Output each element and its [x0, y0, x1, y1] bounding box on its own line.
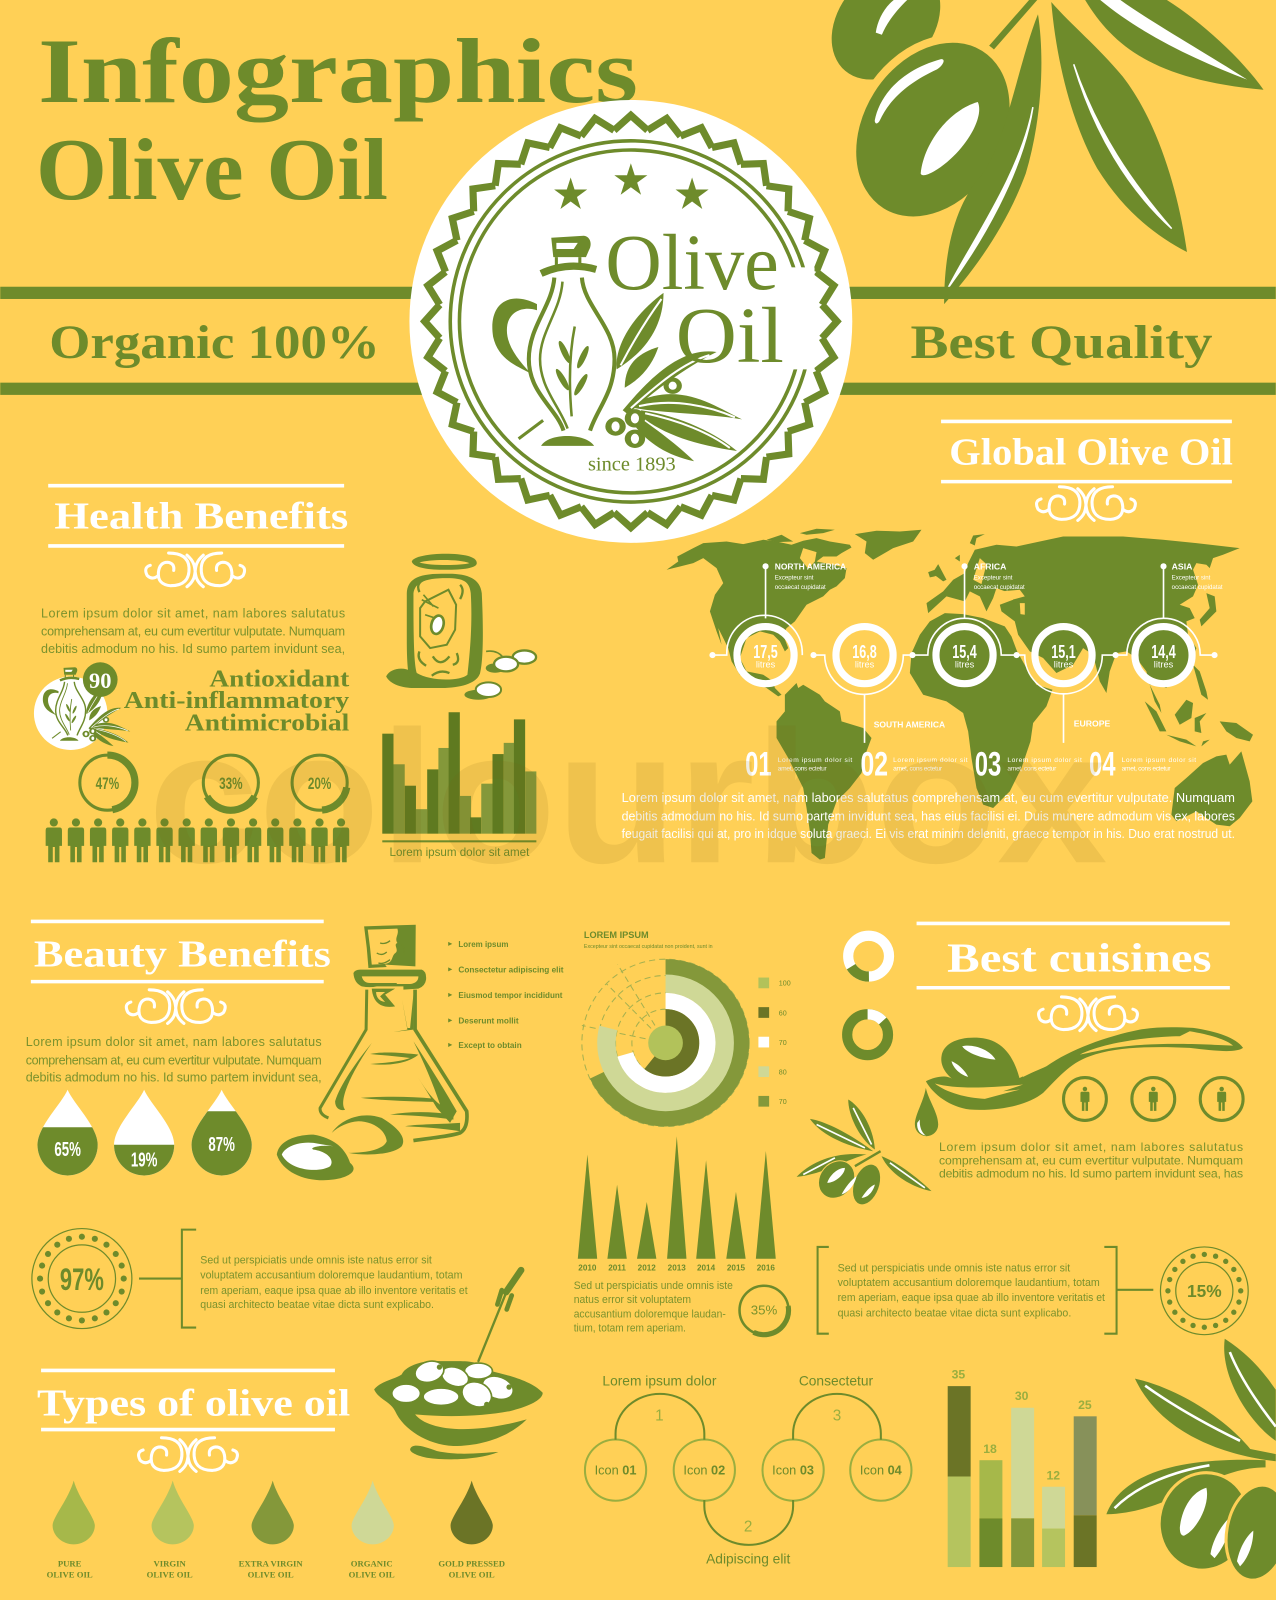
left bracket text: rem aperiam, eaque ipsa quae ab illo inventore veritatis et	[200, 1285, 468, 1297]
small donut green	[847, 1014, 888, 1055]
bullet list: Eiusmod tempor incididunt	[458, 990, 563, 1000]
beauty paragraph: comprehensam at, eu cum evertitur vulputate. Numquam	[26, 1053, 322, 1067]
map region labels: Excepteur sint	[974, 575, 1013, 582]
right bracket text: quasi architecto beatae vitae dicta sunt explicabo.	[838, 1307, 1071, 1319]
beauty paragraph	[26, 1035, 322, 1085]
map rings with values: litres	[855, 659, 875, 669]
stacked bar chart: 30	[1015, 1389, 1029, 1403]
process diagram: icon circles and arcs: Icon 02	[683, 1462, 725, 1477]
numbered notes 01-04: Lorem ipsum dolor sit	[893, 757, 968, 764]
oil type labels: OLIVE OIL	[147, 1570, 193, 1580]
stat: 15 percent circle: 15%	[1187, 1281, 1222, 1301]
heading: Types of olive oil	[37, 1370, 350, 1471]
numbered notes 01-04: amet, cons ectetur	[1007, 765, 1057, 772]
map region labels: occaecat cupidatat	[775, 584, 826, 591]
map region labels: occaecat cupidatat	[1172, 584, 1223, 591]
watermark: colourbox	[148, 692, 1107, 903]
health paragraph: comprehensam at, eu cum evertitur vulputate. Numquam	[41, 625, 345, 639]
heading: Best cuisines: Best cuisines	[947, 935, 1211, 980]
map region labels: AFRICA	[974, 561, 1007, 571]
drop gauge 65 percent: 65%	[54, 1139, 81, 1161]
green bands	[0, 287, 1276, 395]
oil type labels: GOLD PRESSED	[438, 1558, 505, 1568]
bar chart: overlapping bars	[382, 712, 536, 859]
icon: flask with olives	[277, 925, 467, 1180]
central badge: Olive Oil since 1893: Oil	[676, 292, 784, 380]
stacked bar chart: 18	[983, 1442, 997, 1456]
bullet list: Consectetur adipiscing elit	[458, 964, 564, 974]
percentage rings 47 33 20: 47%	[96, 775, 119, 793]
central badge: Olive Oil since 1893: since 1893	[588, 453, 676, 475]
chart legend: 60	[779, 1009, 787, 1017]
oil type labels: OLIVE OIL	[449, 1570, 495, 1580]
left bracket	[139, 1230, 196, 1328]
right bracket text	[838, 1262, 1105, 1319]
stacked bar chart: 12	[1047, 1469, 1060, 1483]
cuisines paragraph: debitis admodum no his. Id sumo partem invidunt sea, has	[939, 1167, 1243, 1181]
icon: small bottle with 90 badge	[34, 662, 130, 750]
map rings with values: litres	[756, 659, 776, 669]
heading: Global Olive Oil	[941, 421, 1233, 520]
ring 35 percent	[736, 1282, 792, 1339]
numbered notes 01-04: Lorem ipsum dolor sit	[778, 757, 852, 764]
stacked bar chart	[948, 1368, 1097, 1567]
small donut white	[848, 936, 889, 977]
title: Olive Oil: Olive Oil	[36, 121, 388, 218]
central badge: Olive Oil since 1893: Olive	[605, 219, 779, 307]
spike bar chart 2010-2016	[578, 1136, 776, 1272]
process diagram: icon circles and arcs: 1	[655, 1407, 664, 1424]
stat: 97 percent circle: 97%	[60, 1261, 104, 1297]
process diagram: icon circles and arcs: 2	[744, 1519, 752, 1536]
icon: small bottle with 90 badge: 90	[89, 668, 111, 693]
oil type labels: PURE	[58, 1558, 82, 1568]
map rings with values	[737, 627, 1192, 684]
map rings with values: 17,5	[753, 641, 778, 662]
subtitle: Organic 100%: Organic 100%	[49, 316, 380, 369]
bottom right olive branch	[1106, 1339, 1276, 1585]
process diagram: icon circles and arcs	[585, 1374, 911, 1566]
spike chart caption: natus error sit voluptatem	[574, 1294, 691, 1306]
bullet list: Except to obtain	[458, 1040, 522, 1050]
oil type labels: EXTRA VIRGIN	[239, 1558, 303, 1568]
title: Infographics: Infographics	[38, 20, 638, 122]
heading: Health Benefits	[48, 486, 348, 587]
bullet list: Lorem ipsum	[458, 939, 509, 949]
chart title	[584, 930, 713, 950]
icon: small olive branch	[797, 1100, 932, 1208]
drop gauge 87 percent: 87%	[208, 1134, 235, 1156]
process diagram: icon circles and arcs: Icon 04	[860, 1462, 903, 1477]
global paragraph: debitis admodum no his. Id sumo partem invidunt sea, has eius facilisi ei. Duis munere admodum vis ex, labores	[622, 808, 1235, 823]
numbered notes 01-04: 01	[745, 746, 772, 784]
bullet list	[448, 939, 564, 1050]
spike chart caption	[574, 1280, 733, 1335]
drop gauge 87 percent	[192, 1090, 252, 1176]
spike bar chart 2010-2016: 2011	[608, 1263, 626, 1272]
map rings with values: 16,8	[852, 641, 877, 662]
stacked bar chart: 35	[952, 1368, 965, 1382]
oil type labels: OLIVE OIL	[349, 1570, 395, 1580]
right bracket text: rem aperiam, eaque ipsa quae ab illo inventore veritatis et	[838, 1292, 1105, 1304]
process diagram: icon circles and arcs: Adipiscing elit	[706, 1551, 790, 1566]
spike chart caption: tium, totam rem aperiam.	[574, 1323, 686, 1335]
right brackets	[818, 1247, 1153, 1334]
numbered notes 01-04: 03	[975, 746, 1001, 784]
icon: olive on spoon with drop	[915, 1027, 1243, 1136]
map region labels: EUROPE	[1074, 719, 1110, 729]
spike chart caption: Sed ut perspiciatis unde omnis iste	[574, 1280, 733, 1292]
process diagram: icon circles and arcs: 3	[833, 1407, 841, 1424]
stat: 97 percent circle	[32, 1229, 132, 1329]
oil type labels: OLIVE OIL	[47, 1570, 93, 1580]
row of people icons	[46, 818, 349, 862]
health benefit list: Antioxidant	[209, 666, 350, 693]
person circle icons	[1064, 1078, 1243, 1120]
spike bar chart 2010-2016: 2010	[578, 1263, 597, 1272]
process diagram: icon circles and arcs: Consectetur	[799, 1374, 873, 1389]
chart legend	[758, 978, 791, 1107]
percentage rings 47 33 20	[80, 745, 352, 820]
right bracket text: Sed ut perspiciatis unde omnis iste natus error sit	[838, 1262, 1070, 1274]
map region labels: Excepteur sint	[1172, 575, 1211, 582]
percentage rings 47 33 20: 20%	[308, 775, 332, 793]
map rings with values: 14,4	[1151, 641, 1176, 662]
oil type labels: ORGANIC	[351, 1558, 393, 1568]
health benefit list: Anti-inflammatory	[124, 687, 349, 714]
cuisines paragraph: comprehensam at, eu cum evertitur vulputate. Numquam	[939, 1153, 1243, 1167]
spike bar chart 2010-2016: 2015	[727, 1263, 745, 1272]
world map	[667, 529, 1253, 860]
chart legend: 80	[779, 1068, 787, 1076]
oil type drops	[53, 1481, 493, 1544]
drop gauge 65 percent	[37, 1090, 98, 1176]
numbered notes 01-04: amet, cons ectetur	[778, 765, 828, 772]
stacked bar chart: 25	[1078, 1398, 1092, 1412]
health benefit list: Antimicrobial	[185, 710, 349, 737]
map rings with values: litres	[955, 659, 975, 669]
chart title: Excepteur sint occaecat cupidatat non proident, sunt in	[584, 944, 713, 950]
beauty paragraph: debitis admodum no his. Id sumo partem invidunt sea,	[26, 1071, 322, 1085]
subtitle: Best Quality: Best Quality	[910, 316, 1213, 369]
numbered notes 01-04: 04	[1089, 746, 1116, 784]
left bracket text: Sed ut perspiciatis unde omnis iste natus error sit	[200, 1254, 432, 1266]
stat: 15 percent circle	[1160, 1247, 1248, 1335]
numbered notes 01-04: Lorem ipsum dolor sit	[1007, 757, 1082, 764]
spike bar chart 2010-2016: 2016	[757, 1263, 775, 1272]
global paragraph: Lorem ipsum dolor sit amet, nam labores salutatus comprehensam at, eu cum evertitur vulputate. Numquam	[622, 790, 1235, 805]
map region labels	[775, 561, 1223, 730]
map region labels: NORTH AMERICA	[775, 561, 847, 571]
map rings with values: 15,1	[1051, 641, 1076, 662]
heading: Types of olive oil: Types of olive oil	[37, 1382, 350, 1424]
central badge: Olive Oil since 1893	[368, 72, 894, 571]
beauty paragraph: Lorem ipsum dolor sit amet, nam labores salutatus	[26, 1035, 322, 1049]
numbered notes 01-04: Lorem ipsum dolor sit	[1122, 757, 1196, 764]
map rings with values: litres	[1054, 659, 1074, 669]
heading: Beauty Benefits: Beauty Benefits	[34, 933, 331, 975]
spike bar chart 2010-2016: 2013	[668, 1263, 686, 1272]
map connectors and markers	[712, 566, 1215, 743]
map rings with values: 15,4	[952, 641, 977, 662]
health paragraph: debitis admodum no his. Id sumo partem invidunt sea,	[41, 642, 345, 656]
map region labels: ASIA	[1172, 561, 1193, 571]
left bracket text: quasi architecto beatae vitae dicta sunt explicabo.	[200, 1299, 434, 1311]
chart title: LOREM IPSUM	[584, 930, 649, 940]
top right olive branch	[809, 0, 1264, 304]
process diagram: icon circles and arcs: Icon 03	[772, 1462, 814, 1477]
oil type labels	[47, 1558, 505, 1580]
numbered notes 01-04: 02	[860, 746, 888, 784]
spike bar chart 2010-2016: 2012	[638, 1263, 656, 1272]
oil type labels: OLIVE OIL	[248, 1570, 294, 1580]
oil type labels: VIRGIN	[154, 1558, 186, 1568]
health benefit list	[124, 666, 350, 737]
heading: Global Olive Oil: Global Olive Oil	[949, 431, 1233, 473]
icon: olive jar	[386, 554, 536, 700]
spike bar chart 2010-2016: 2014	[697, 1263, 716, 1272]
map dots	[709, 563, 1218, 658]
global paragraph	[622, 790, 1235, 841]
cuisines paragraph	[939, 1140, 1243, 1181]
health paragraph: Lorem ipsum dolor sit amet, nam labores salutatus	[41, 606, 345, 620]
numbered notes 01-04: amet, cons ectetur	[1122, 765, 1171, 772]
numbered notes 01-04	[745, 746, 1196, 784]
process diagram: icon circles and arcs: Icon 01	[595, 1462, 636, 1477]
spike chart caption: accusantium doloremque laudan-	[574, 1308, 726, 1320]
heading: Best cuisines	[917, 923, 1230, 1031]
process diagram: icon circles and arcs: Lorem ipsum dolor	[602, 1374, 717, 1389]
heading: Health Benefits: Health Benefits	[54, 496, 348, 538]
right bracket text: voluptatem accusantium doloremque laudantium, totam	[838, 1277, 1100, 1289]
icon: olive bowl with skewer	[374, 1270, 543, 1459]
numbered notes 01-04: amet, cons ectetur	[893, 765, 943, 772]
map region labels: SOUTH AMERICA	[874, 720, 946, 730]
cuisines paragraph: Lorem ipsum dolor sit amet, nam labores salutatus	[939, 1140, 1243, 1154]
map rings with values: litres	[1154, 659, 1174, 669]
bar chart: overlapping bars: Lorem ipsum dolor sit amet	[390, 846, 530, 859]
health paragraph	[41, 606, 345, 656]
drop gauge 19 percent	[114, 1090, 174, 1176]
heading: Beauty Benefits	[31, 921, 331, 1023]
ring 35 percent: 35%	[751, 1302, 777, 1317]
left bracket text: voluptatem accusantium doloremque laudantium, totam	[200, 1270, 463, 1282]
map region labels: occaecat cupidatat	[974, 584, 1025, 591]
percentage rings 47 33 20: 33%	[219, 775, 243, 793]
chart legend: 100	[779, 980, 791, 988]
chart legend: 70	[779, 1039, 787, 1047]
map region labels: Excepteur sint	[775, 575, 814, 582]
drop gauge 19 percent: 19%	[131, 1149, 157, 1171]
left bracket text	[200, 1254, 468, 1311]
radial donut chart	[582, 959, 749, 1127]
chart legend: 70	[779, 1098, 787, 1106]
global paragraph: feugait facilisi qui at, pro in idque soluta graeci. Ei vis erat minim deleniti, graece tempor in his. Duo erat nostrud ut.	[622, 826, 1235, 841]
bullet list: Deserunt mollit	[458, 1015, 519, 1025]
